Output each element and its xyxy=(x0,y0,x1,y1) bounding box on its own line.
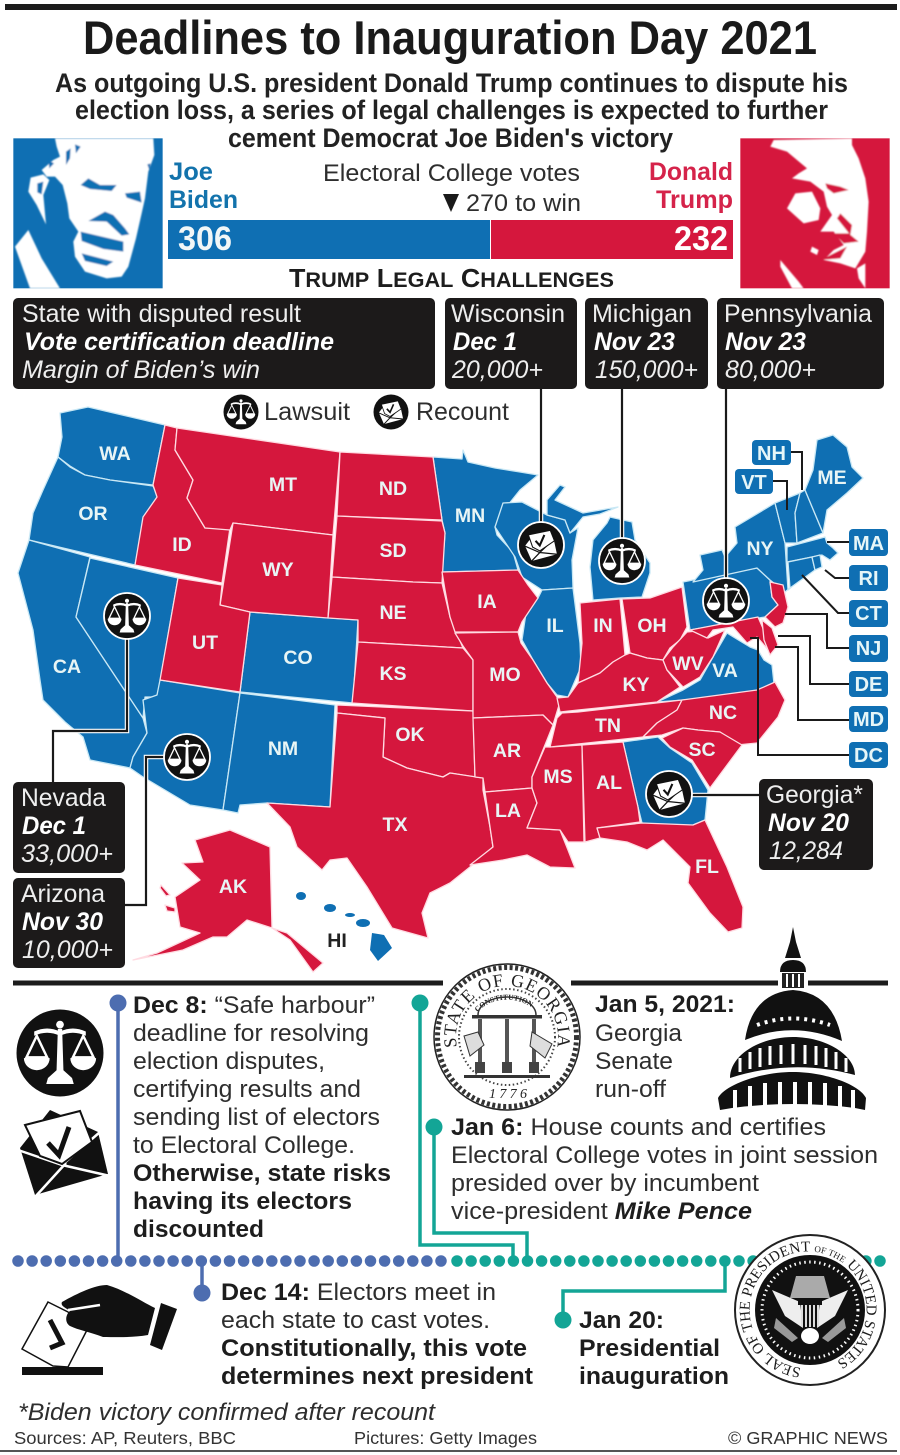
state abbreviations: ME xyxy=(817,467,847,489)
callout: Arizona: 10,000+ xyxy=(22,936,113,964)
portrait: Donald Trump xyxy=(740,138,890,288)
timeline marker: Dec 14 xyxy=(194,1261,210,1302)
state abbreviations: SD xyxy=(379,540,407,562)
icon: US Capitol dome xyxy=(718,927,866,1110)
text: Dec 14: Constitutionally, this vote xyxy=(221,1335,527,1362)
small-state tags: MD xyxy=(853,709,884,731)
text: Dec 14: Dec 14: Electors meet in xyxy=(221,1279,496,1306)
icon: lawsuit legend xyxy=(224,394,258,430)
subtitle xyxy=(55,68,848,153)
connector lines for small-state tags xyxy=(750,452,849,755)
state abbreviations: NC xyxy=(709,702,737,724)
state abbreviations: ND xyxy=(379,478,407,500)
small-state tags: DE xyxy=(855,674,882,696)
callout: Georgia xyxy=(759,779,873,870)
state abbreviations: VA xyxy=(712,660,738,682)
callout: Nevada: Nevada xyxy=(21,784,106,812)
callout: Nevada: 33,000+ xyxy=(21,840,113,868)
title: Deadlines to Inauguration Day 2021 xyxy=(83,11,817,64)
text: Jan 6 xyxy=(451,1114,878,1225)
callout connector lines xyxy=(53,389,760,905)
state abbreviations: NE xyxy=(379,602,407,624)
callout: Michigan xyxy=(585,298,708,389)
map of US states xyxy=(18,407,863,972)
candidate name: Donald Trump: Donald xyxy=(649,158,733,186)
timeline marker: Dec 8 xyxy=(110,994,126,1261)
state abbreviations: MO xyxy=(489,664,521,686)
state abbreviations: WA xyxy=(99,443,131,465)
portrait: Joe Biden xyxy=(13,138,163,288)
top rule xyxy=(5,4,897,10)
text: Dec 8 xyxy=(133,992,391,1243)
icon: ballot envelope large xyxy=(18,1110,110,1197)
text: Jan 6: vice-president Mike Pence xyxy=(451,1198,752,1225)
callout: Pennsylvania xyxy=(717,298,884,389)
state abbreviations: IN xyxy=(593,615,613,637)
text: Dec 8: discounted xyxy=(133,1216,264,1243)
callout: Michigan: Nov 23 xyxy=(594,328,675,356)
text: Dec 14: determines next president xyxy=(221,1363,533,1390)
text: Jan 6: Electoral College votes in joint session xyxy=(451,1142,878,1169)
callout: Wisconsin: 20,000+ xyxy=(451,356,543,384)
text: Jan 20: inauguration xyxy=(579,1363,729,1390)
state abbreviations: WV xyxy=(672,653,704,675)
icon: recount legend xyxy=(374,394,408,430)
Trump states (red) xyxy=(133,425,788,972)
callout: Arizona xyxy=(13,878,125,968)
small-state tags xyxy=(735,440,888,768)
timeline marker: Jan 5 xyxy=(412,994,513,1261)
footnote: *Biden victory confirmed after recount xyxy=(18,1399,436,1426)
text: Dec 8: having its electors xyxy=(133,1188,352,1215)
callout: Wisconsin xyxy=(445,298,577,389)
electoral college heading: Electoral College votes xyxy=(323,160,580,187)
small-state tags: DC xyxy=(854,745,883,767)
text: Dec 8: election disputes, xyxy=(133,1048,325,1075)
state abbreviations: WY xyxy=(262,559,294,581)
legend key box: Vote certification deadline xyxy=(24,328,334,356)
electoral college heading: 270 to win xyxy=(466,190,581,217)
subtitle: election loss, a series of legal challenges is expected to further xyxy=(75,95,828,125)
timeline: teal dots xyxy=(457,1255,882,1267)
state abbreviations: UT xyxy=(192,632,218,654)
Biden states (blue) xyxy=(18,407,863,827)
bottom rule xyxy=(0,1450,897,1452)
Hawaii islands xyxy=(296,892,392,961)
timeline: blue dots xyxy=(18,1255,444,1267)
text: Dec 14: each state to cast votes. xyxy=(221,1307,490,1334)
text: Jan 6: Jan 6: House counts and certifies xyxy=(451,1114,826,1141)
small-state tags: VT xyxy=(741,472,767,494)
icon: Nevada lawsuit xyxy=(104,593,150,639)
state abbreviations: AL xyxy=(596,772,622,794)
candidate name: Donald Trump: Trump xyxy=(656,186,733,214)
state abbreviations: MS xyxy=(543,766,573,788)
text: Jan 20: Presidential xyxy=(579,1335,720,1362)
text: Dec 8: deadline for resolving xyxy=(133,1020,369,1047)
callout: Georgia: 12,284 xyxy=(769,837,843,865)
state abbreviations: OH xyxy=(637,615,667,637)
small-state tags: MA xyxy=(853,533,884,555)
copyright: © GRAPHIC NEWS xyxy=(728,1428,888,1448)
electoral votes bar: 306 xyxy=(178,220,232,258)
state abbreviations: TX xyxy=(383,814,407,836)
icon: Michigan lawsuit xyxy=(599,538,645,584)
candidate name: Joe Biden: Joe xyxy=(169,158,213,186)
icon: Georgia state seal: STATE OF GEORGIA xyxy=(444,974,570,1047)
icon: Georgia state seal: CONSTITUTION xyxy=(475,994,534,1012)
text: Jan 20: Jan 20: xyxy=(579,1307,664,1334)
legend label: lawsuit: Lawsuit xyxy=(264,398,350,426)
state abbreviations: AK xyxy=(219,876,247,898)
icon: seal of the president: SEAL OF THE PRESIDENT OF THE UNITED STATES xyxy=(740,1242,876,1378)
text: Jan 20 xyxy=(579,1307,729,1390)
text: Dec 8: Dec 8: “Safe harbour” xyxy=(133,992,375,1019)
callout: Georgia: Georgia* xyxy=(766,781,863,809)
state abbreviations: CA xyxy=(53,656,81,678)
icon: hand casting ballot xyxy=(22,1285,177,1375)
icon: Georgia recount xyxy=(646,771,692,817)
state abbreviations: FL xyxy=(695,856,719,878)
sources: Sources: AP, Reuters, BBC xyxy=(14,1428,236,1448)
text: Jan 5: Senate xyxy=(595,1048,673,1075)
icon: Pennsylvania lawsuit xyxy=(703,578,749,624)
icon: Wisconsin recount xyxy=(518,522,564,568)
small-state tags: NH xyxy=(757,443,786,465)
candidate name: Joe Biden: Biden xyxy=(169,186,238,214)
callout: Pennsylvania: 80,000+ xyxy=(725,356,816,384)
candidate name: Joe Biden xyxy=(169,158,238,214)
state abbreviations: OR xyxy=(78,503,108,525)
text: Jan 5 xyxy=(595,991,735,1103)
state abbreviations: NY xyxy=(746,538,774,560)
state abbreviations: KY xyxy=(622,674,650,696)
text: Jan 6: presided over by incumbent xyxy=(451,1170,759,1197)
legend key box: State with disputed result xyxy=(22,300,301,328)
electoral college heading xyxy=(323,160,581,217)
timeline marker: Jan 20 xyxy=(554,1261,725,1328)
state abbreviations xyxy=(53,443,847,952)
subtitle: As outgoing U.S. president Donald Trump continues to dispute his xyxy=(55,68,848,98)
callout: Michigan: 150,000+ xyxy=(595,356,698,384)
state abbreviations: MN xyxy=(455,505,485,527)
text: Dec 8: to Electoral College. xyxy=(133,1132,355,1159)
state abbreviations: SC xyxy=(688,739,716,761)
callout: Wisconsin: Wisconsin xyxy=(451,300,565,328)
candidate name: Donald Trump xyxy=(649,158,733,214)
electoral votes bar xyxy=(168,220,733,259)
small-state tags: CT xyxy=(855,603,882,625)
callout: Arizona: Nov 30 xyxy=(22,908,103,936)
timeline marker: Jan 6 xyxy=(426,1118,527,1261)
small-state tags: NJ xyxy=(856,638,881,660)
text: Jan 5: Jan 5, 2021: xyxy=(595,991,735,1018)
picture credit: Pictures: Getty Images xyxy=(354,1428,537,1448)
legend key box: Margin of Biden’s win xyxy=(22,356,260,384)
electoral votes bar: 232 xyxy=(674,220,728,258)
icon: Georgia state seal: 1776 xyxy=(489,1087,527,1102)
small-state tags: RI xyxy=(858,568,878,590)
state abbreviations: OK xyxy=(395,724,425,746)
callout: Pennsylvania: Pennsylvania xyxy=(724,300,872,328)
icon: Arizona lawsuit xyxy=(164,734,210,780)
state abbreviations: CO xyxy=(283,647,313,669)
legend key box xyxy=(13,298,435,389)
state abbreviations: KS xyxy=(379,663,407,685)
text: Dec 14 xyxy=(221,1279,533,1390)
section divider xyxy=(13,980,888,986)
state abbreviations: NM xyxy=(268,738,298,760)
text: Dec 8: Otherwise, state risks xyxy=(133,1160,391,1187)
state abbreviations: IA xyxy=(477,591,497,613)
state abbreviations: AR xyxy=(493,740,521,762)
text: Dec 8: certifying results and xyxy=(133,1076,361,1103)
text: Jan 5: Georgia xyxy=(595,1020,682,1047)
state abbreviations: LA xyxy=(495,800,521,822)
state abbreviations: TN xyxy=(595,715,621,737)
legend label: recount: Recount xyxy=(416,398,509,426)
callout: Arizona: Arizona xyxy=(21,880,105,908)
heading: Trump legal challenges: TRUMP LEGAL CHALLENGES xyxy=(289,263,614,293)
callout: Nevada xyxy=(13,782,125,873)
state abbreviations: IL xyxy=(546,615,564,637)
icon: Georgia state seal xyxy=(433,963,581,1111)
state abbreviations: ID xyxy=(172,534,192,556)
callout: Wisconsin: Dec 1 xyxy=(453,328,517,356)
subtitle: cement Democrat Joe Biden's victory xyxy=(228,123,673,153)
state abbreviations: HI xyxy=(327,930,347,952)
callout: Georgia: Nov 20 xyxy=(768,809,849,837)
text: Dec 8: sending list of electors xyxy=(133,1104,380,1131)
callout: Pennsylvania: Nov 23 xyxy=(725,328,806,356)
text: Jan 5: run-off xyxy=(595,1076,666,1103)
icon: scales of justice large xyxy=(16,1010,104,1096)
callout: Michigan: Michigan xyxy=(592,300,692,328)
state abbreviations: MT xyxy=(269,474,297,496)
callout: Nevada: Dec 1 xyxy=(22,812,86,840)
